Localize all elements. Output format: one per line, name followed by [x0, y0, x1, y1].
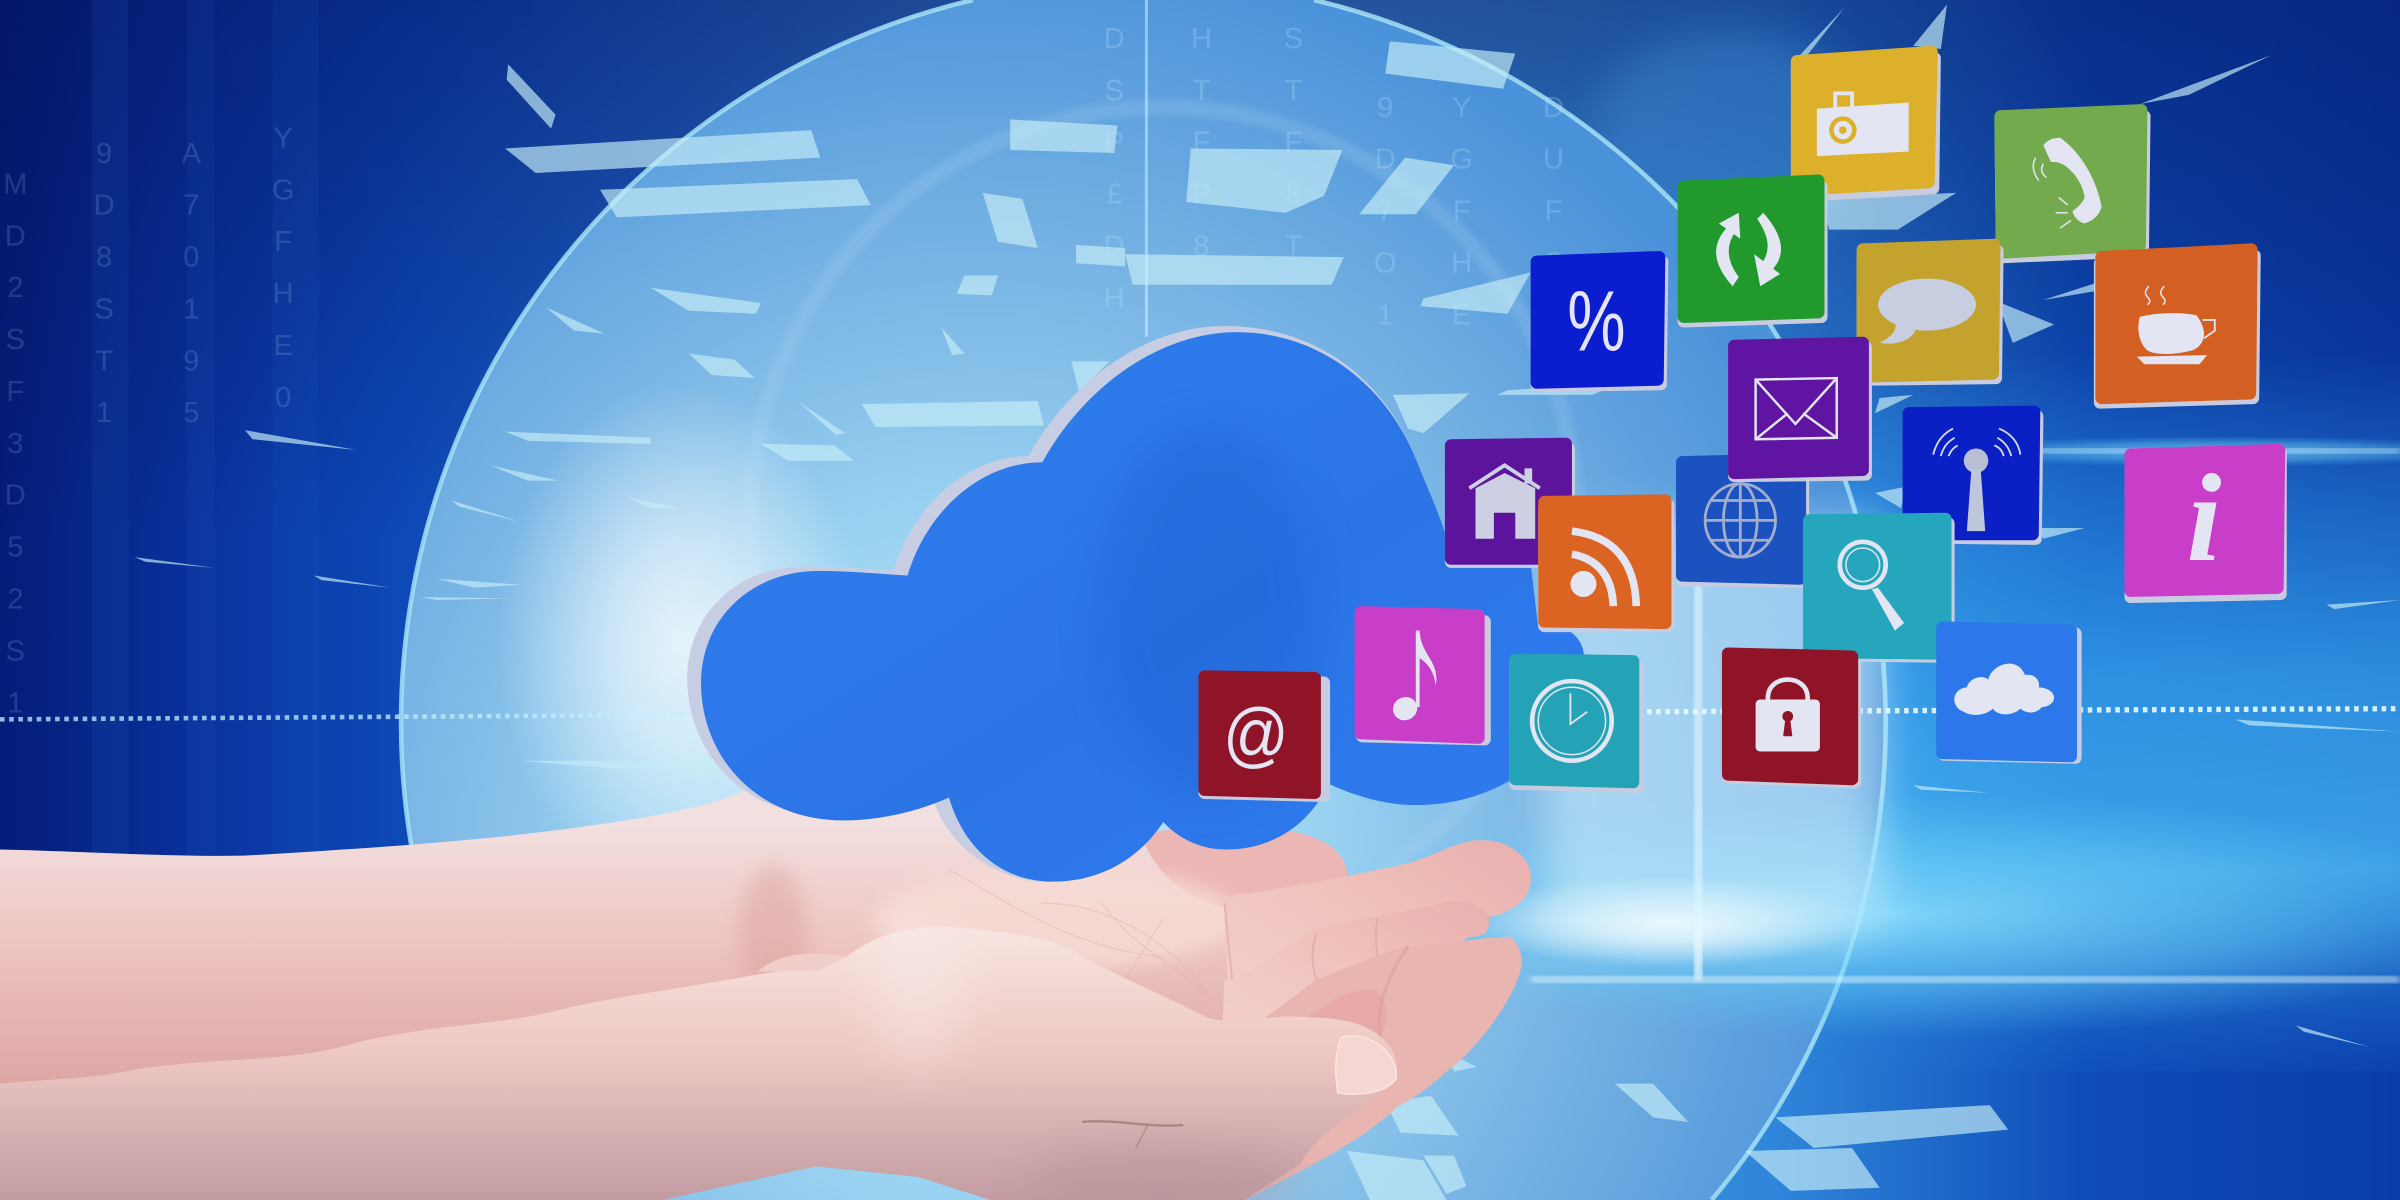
icon: globe [1682, 459, 1803, 582]
far thumb behind cloud [1140, 826, 1347, 913]
foreground code characters: YGFHE [1446, 92, 1478, 351]
icon: at sign [1205, 677, 1324, 796]
icon: refresh [1684, 181, 1821, 321]
icon: phone [2001, 110, 2144, 257]
background code characters: YGFHE0 [267, 122, 299, 434]
cloud side edge [687, 326, 1584, 882]
icon: music note [1361, 612, 1485, 739]
cloud [701, 332, 1584, 882]
background code characters [0, 122, 299, 739]
dotted horizontal light line [0, 709, 2400, 719]
palm detail [739, 865, 1240, 1010]
icon: rss [1544, 501, 1668, 626]
upper arm and palm [0, 788, 1385, 1133]
icon: info [2131, 449, 2281, 597]
icon: info: i [2187, 449, 2222, 588]
background code characters: MD2SF3D52S1 [0, 168, 31, 739]
icon: antenna [1909, 412, 2037, 539]
icon: clock [1515, 660, 1638, 787]
near hand and forearm [0, 927, 1397, 1200]
light glows [497, 0, 2400, 1038]
icon: cup [2100, 249, 2255, 403]
icon: lock [1728, 654, 1855, 782]
glowing circle [401, 0, 1886, 1200]
far fingers [1071, 840, 1531, 1200]
near hand shading [872, 918, 1301, 1200]
foreground code characters: HTFP8 [1186, 23, 1218, 282]
hands [0, 788, 1531, 1200]
thumbnail [1336, 1036, 1396, 1094]
icon: at sign: @ [1223, 695, 1289, 775]
cloud inner shadow [1102, 429, 1316, 796]
background code characters: 9D8ST1 [88, 138, 120, 449]
icon: house [1451, 444, 1569, 562]
icon: mail [1734, 343, 1866, 476]
foreground code characters: 9D7O1 [1369, 92, 1401, 351]
background code characters: A70195 [175, 138, 207, 449]
circle inner ring [750, 107, 1577, 934]
foreground code characters: STF8T [1277, 23, 1309, 282]
icon: chat [1863, 245, 1997, 380]
foreground code characters: DSP£DH [1098, 23, 1130, 334]
icon: small cloud [1942, 628, 2076, 758]
foreground code characters: DUFS [1538, 92, 1570, 299]
icon: percent [1537, 257, 1662, 386]
foreground code characters [1098, 23, 1570, 351]
icon: camera [1797, 52, 1935, 196]
wrist small thumb bump [758, 954, 846, 972]
icon: search [1809, 519, 1948, 657]
icon: percent: % [1567, 274, 1626, 370]
